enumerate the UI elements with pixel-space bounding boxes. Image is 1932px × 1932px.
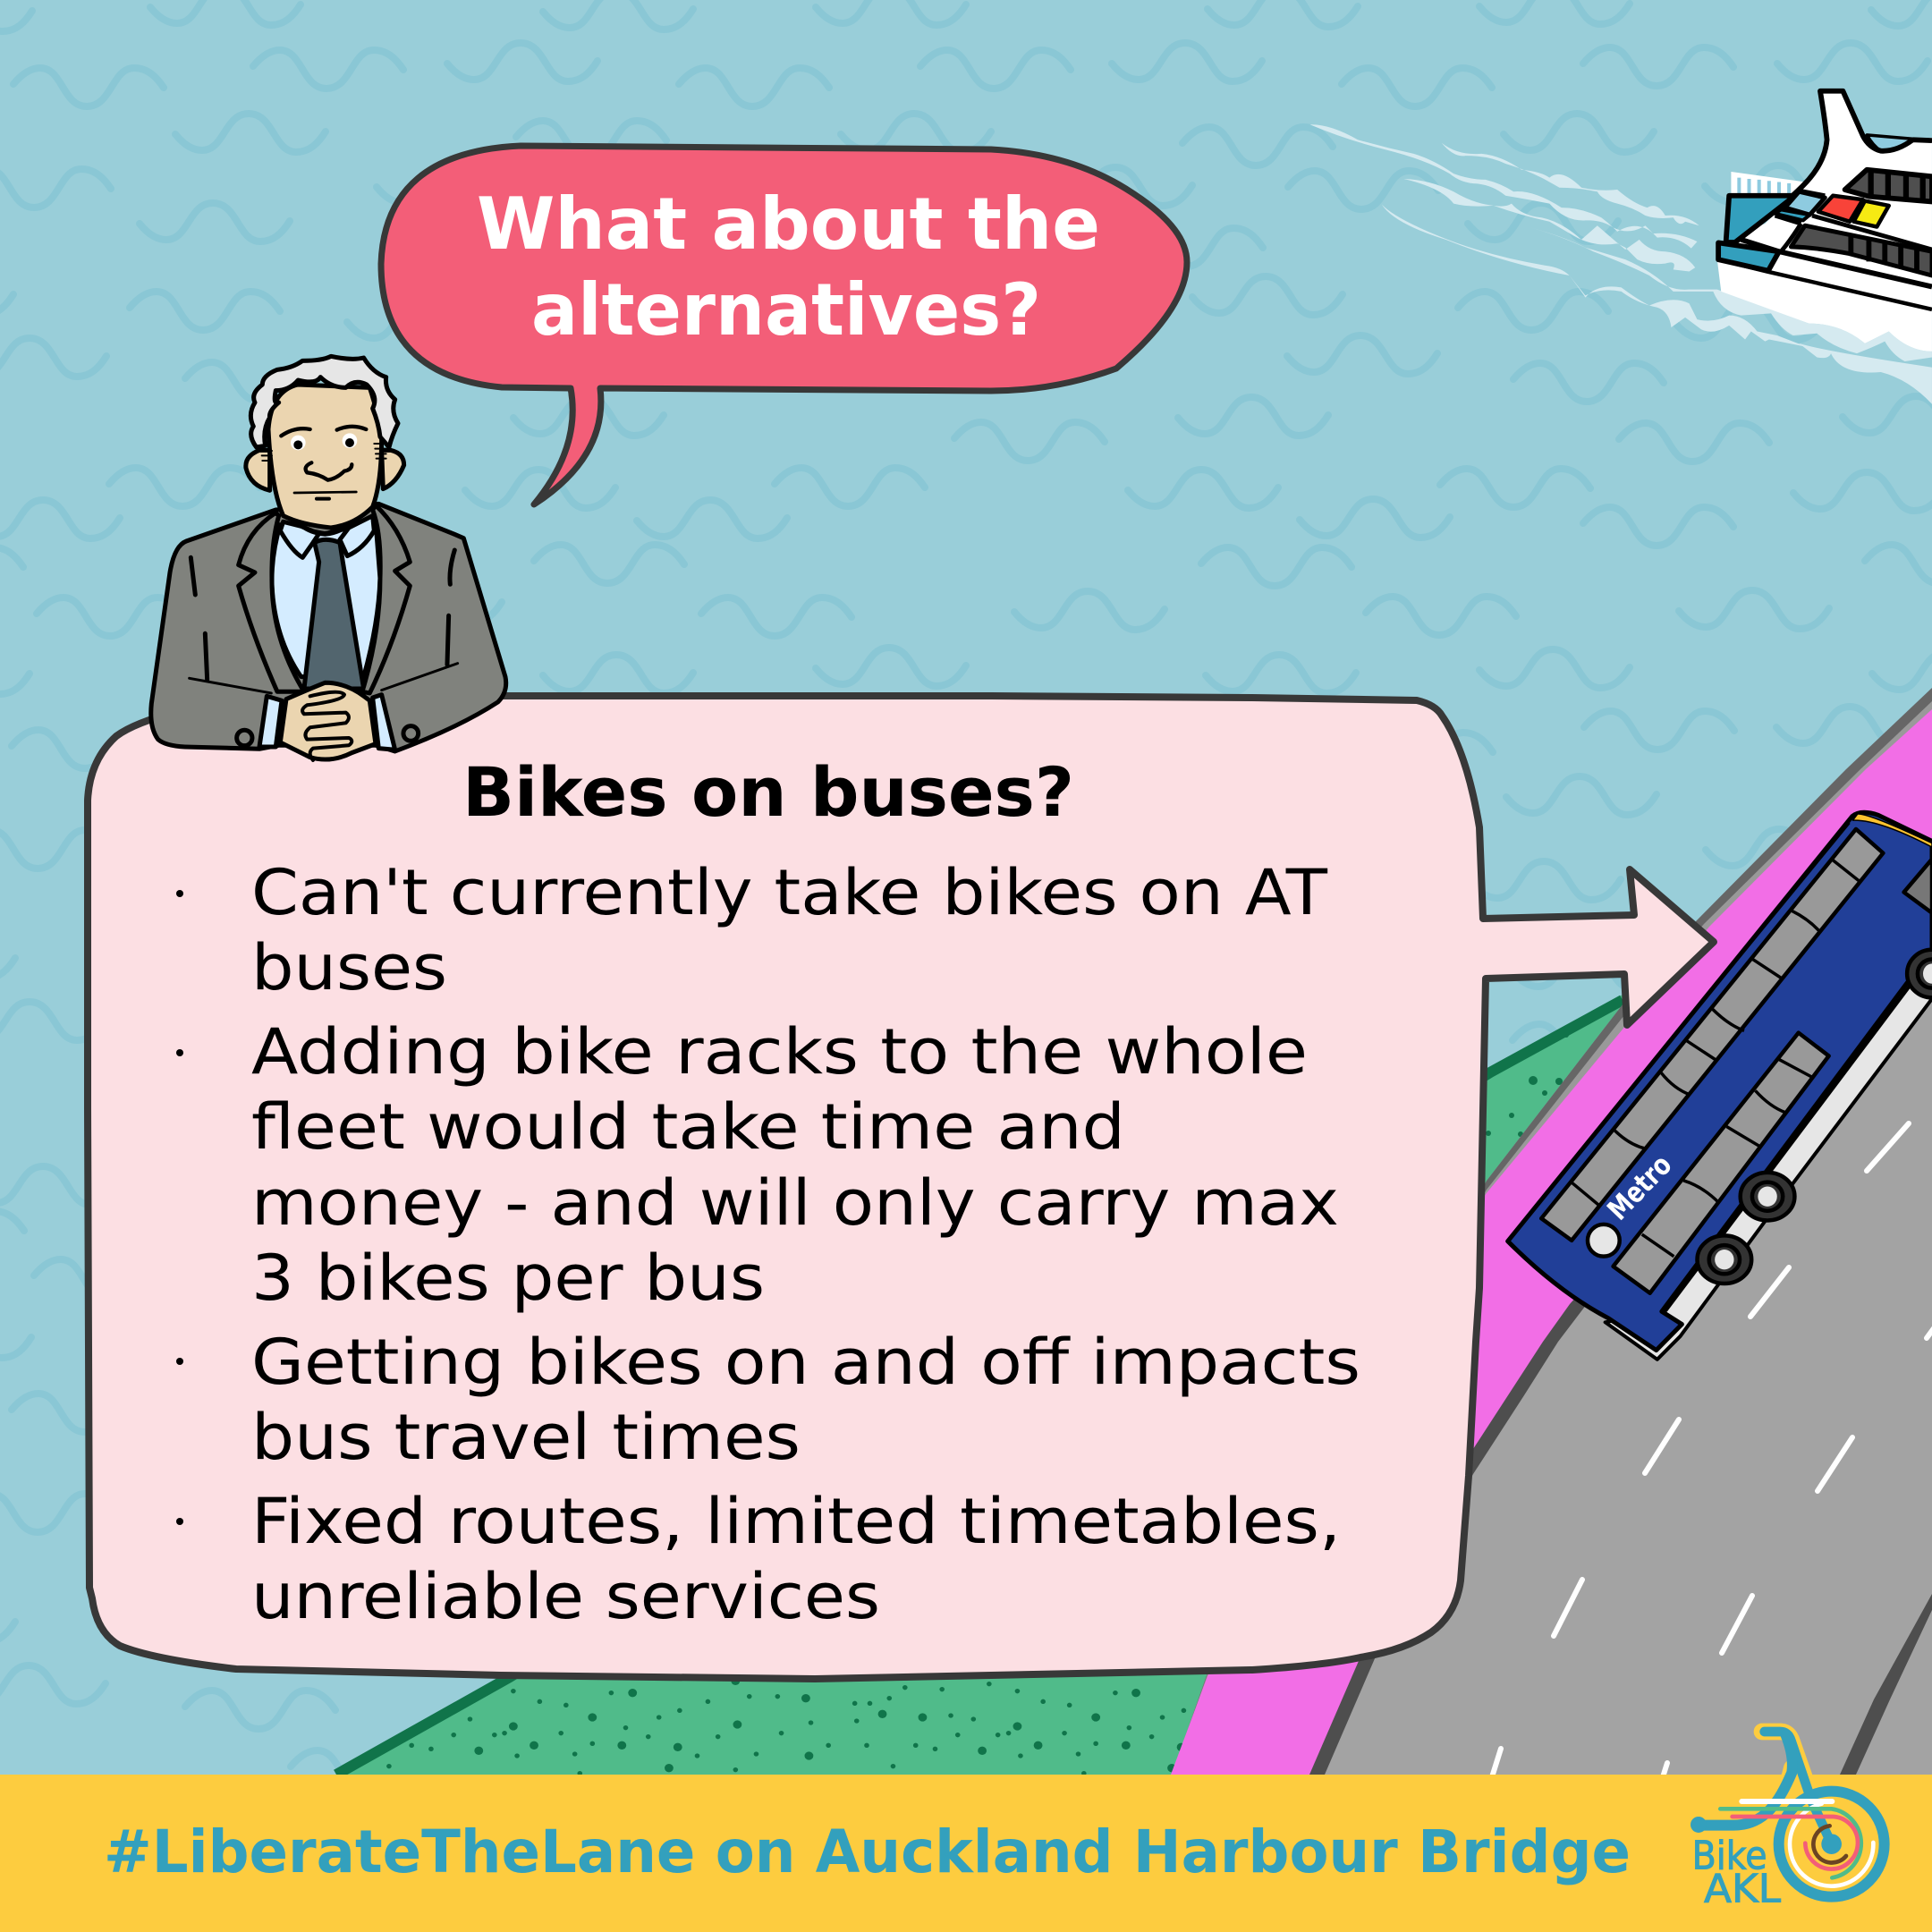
wheels xyxy=(1697,950,1932,1284)
logo frame xyxy=(1765,1732,1832,1844)
bullet 4 xyxy=(176,1485,1341,1633)
panel heading: Bikes on buses? xyxy=(462,752,1074,832)
speech bubble text: What about the xyxy=(477,182,1100,266)
head xyxy=(268,385,382,528)
hair xyxy=(250,356,398,447)
footer hashtag: #LiberateTheLane on Auckland Harbour Bridge xyxy=(104,1818,1631,1886)
hands xyxy=(280,682,376,759)
illustration: man in suit xyxy=(151,356,506,760)
bus body xyxy=(1508,812,1932,1351)
bus xyxy=(1508,812,1932,1360)
eyebrows xyxy=(281,427,366,436)
nose xyxy=(306,462,352,480)
logo: Bike AKL: AKL xyxy=(1704,1868,1781,1912)
upper windows xyxy=(1541,829,1883,1241)
ears xyxy=(246,450,404,490)
bus logo: Metro: Metro xyxy=(1600,1148,1678,1227)
bullet 2: 3 bikes per bus xyxy=(251,1241,765,1315)
road surface xyxy=(1325,903,1932,1775)
sideburns xyxy=(261,444,386,461)
buttons xyxy=(237,730,252,746)
bullet 1: Can't currently take bikes on AT xyxy=(251,856,1327,929)
bullet 1: buses xyxy=(251,931,447,1004)
jacket creases xyxy=(191,550,454,680)
mouth xyxy=(294,488,356,496)
bullet 4: unreliable services xyxy=(251,1560,880,1633)
land speckles xyxy=(386,1677,1186,1775)
green land xyxy=(336,995,1623,1775)
speech bubble xyxy=(381,146,1187,504)
panel: bikes on buses card with arrow xyxy=(88,696,1714,1679)
lane markings xyxy=(1491,1123,1932,1780)
eyes xyxy=(291,436,306,450)
logo wheel xyxy=(1779,1792,1885,1897)
headlight xyxy=(1588,1224,1620,1257)
ferry with wake xyxy=(1309,91,1932,404)
ferry wake xyxy=(1309,124,1932,404)
bullet 3 xyxy=(176,1326,1360,1474)
bullet 3: Getting bikes on and off impacts xyxy=(251,1326,1360,1399)
bullet 2: Adding bike racks to the whole xyxy=(251,1015,1308,1089)
footer band xyxy=(0,1775,1932,1932)
bullet list xyxy=(176,856,1360,1633)
bullet 4: Fixed routes, limited timetables, xyxy=(251,1485,1341,1558)
collar xyxy=(280,516,374,557)
logo rings xyxy=(1790,1804,1873,1886)
pink lane xyxy=(1171,709,1932,1775)
cuffs xyxy=(259,695,395,750)
suit jacket xyxy=(151,504,506,751)
tie xyxy=(304,539,364,689)
bullet 2: money - and will only carry max xyxy=(251,1166,1339,1240)
logo handlebar halo xyxy=(1762,1732,1813,1801)
bridge: road and cycle lane xyxy=(1171,688,1932,1780)
bullet 1 xyxy=(176,856,1327,1004)
lower windows xyxy=(1614,1033,1829,1293)
bus front window xyxy=(1904,859,1932,913)
bullet 2 xyxy=(176,1015,1339,1315)
bullet 3: bus travel times xyxy=(251,1401,801,1474)
road edge xyxy=(1309,894,1932,1775)
lapels xyxy=(239,513,304,691)
logo text: Bike xyxy=(1692,1834,1767,1878)
speech bubble: alternatives? xyxy=(531,268,1041,352)
bus roof stripe xyxy=(1852,814,1932,847)
bridge outer edge xyxy=(1172,688,1932,1775)
logo: Bike AKL xyxy=(1690,1732,1885,1912)
shirt xyxy=(272,521,380,677)
neck xyxy=(301,525,351,535)
ferry body xyxy=(1717,91,1932,352)
bus side stripe xyxy=(1606,981,1932,1360)
bullet 2: fleet would take time and xyxy=(251,1090,1125,1164)
second road edge xyxy=(1840,1594,1932,1775)
